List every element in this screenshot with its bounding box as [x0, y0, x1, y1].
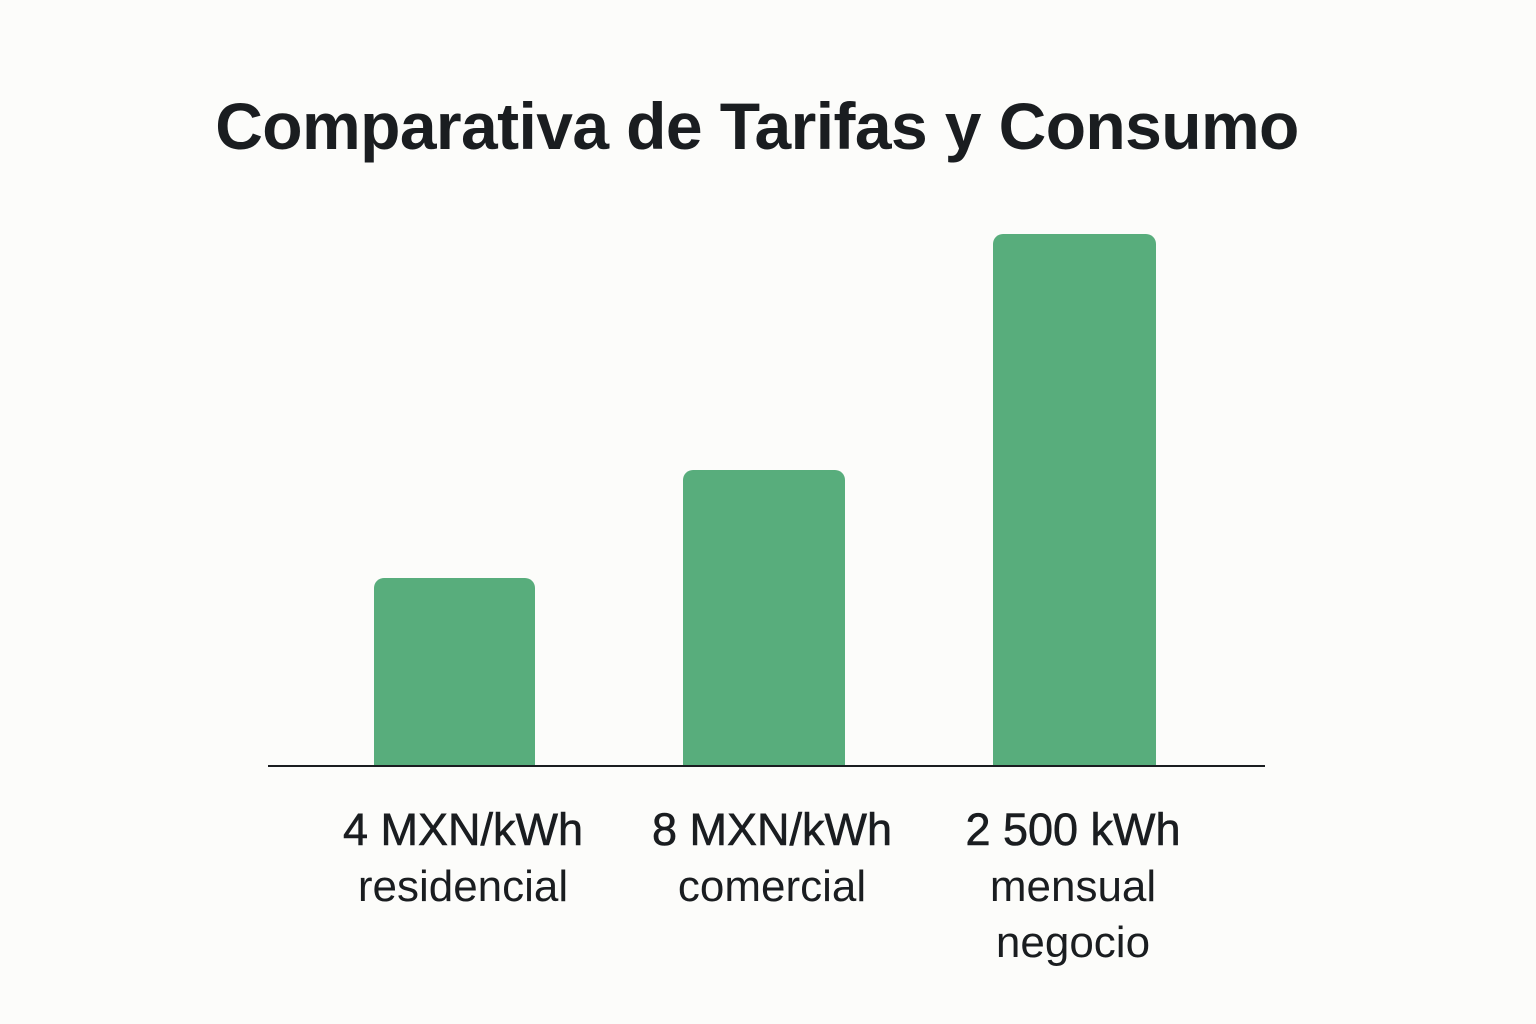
label: negocio	[965, 804, 1181, 967]
label: comercial: comercial	[678, 862, 866, 911]
label: negocio: negocio	[996, 918, 1150, 967]
label: comercial	[652, 804, 892, 911]
label: residencial	[343, 804, 583, 911]
label: residencial: residencial	[358, 862, 568, 911]
label: negocio: 2 500 kWh	[965, 804, 1181, 855]
label: residencial: 4 MXN/kWh	[343, 804, 583, 855]
label: comercial: 8 MXN/kWh	[652, 804, 892, 855]
bar: residencial	[374, 578, 535, 766]
title: Comparativa de Tarifas y Consumo	[215, 89, 1299, 163]
bar: negocio	[993, 234, 1156, 766]
label: negocio: mensual	[990, 862, 1156, 911]
bar: comercial	[683, 470, 845, 766]
axis line	[268, 765, 1265, 767]
